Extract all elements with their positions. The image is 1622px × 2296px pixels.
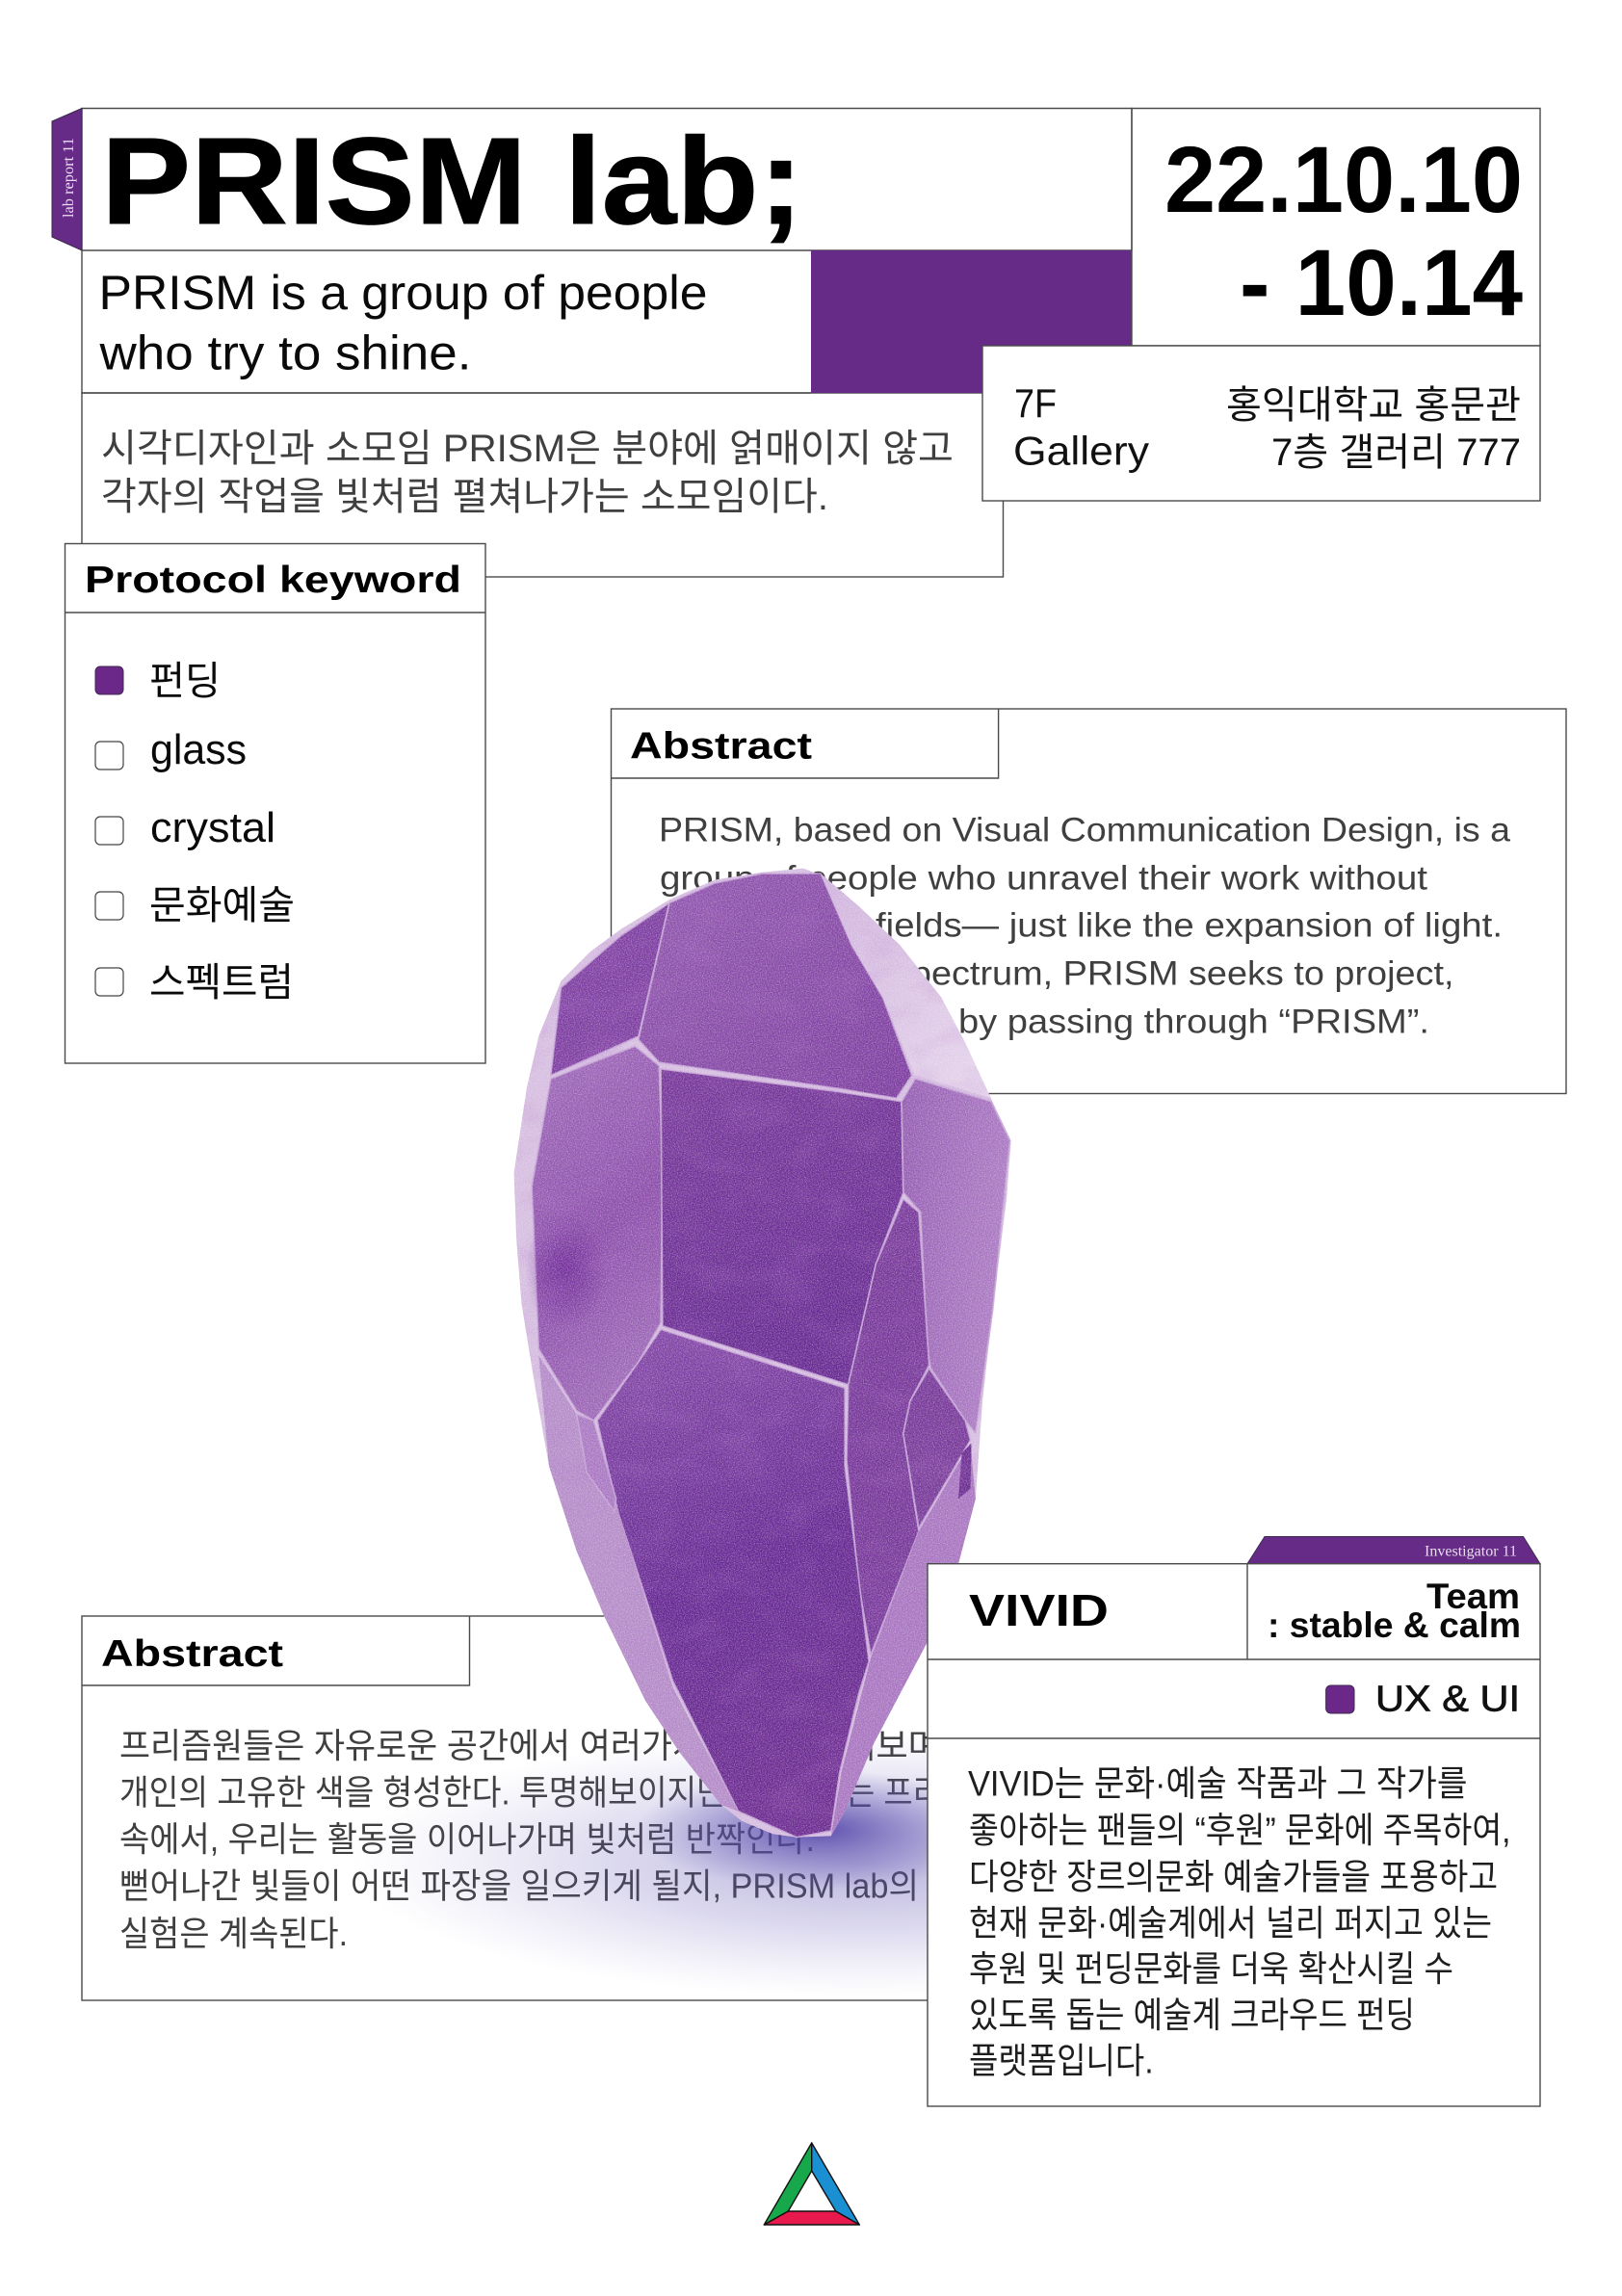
panel: date xyxy=(1132,108,1540,346)
logo: prism triangle xyxy=(764,2143,859,2225)
text: tagline: PRISM is a group of people xyxy=(98,266,707,320)
text: abstract korean body: 해보며 xyxy=(844,1726,940,1765)
title: PRISM lab; xyxy=(101,113,803,250)
tab: investigator: Investigator 11 xyxy=(1425,1543,1517,1560)
text: abstract korean body: 속에서, 우리는 활동을 이어나가며 빛처럼 반짝인다. xyxy=(119,1819,815,1859)
text: VIVID description: 다양한 장르의문화 예술가들을 포용하고 xyxy=(969,1857,1498,1897)
text: abstract english body: by passing through “PRISM”. xyxy=(958,1004,1429,1040)
panel: title header xyxy=(82,108,1132,250)
text: date: 22.10.10 xyxy=(1164,127,1523,232)
text: floor: Gallery xyxy=(1013,428,1149,474)
heading: abstract: Abstract xyxy=(101,1633,283,1675)
crystal shadow xyxy=(352,1731,1373,1996)
text: abstract korean body: 개인의 고유한 색을 형성한다. 투명해보이지만 xyxy=(119,1772,726,1813)
crystal silhouette xyxy=(514,869,1011,1838)
text: date: - 10.14 xyxy=(1240,230,1523,335)
text: VIVID description: 있도록 돕는 예술계 크라우드 펀딩 xyxy=(969,1996,1415,2035)
text: VIVID description: 현재 문화·예술계에서 널리 퍼지고 있는 xyxy=(969,1903,1492,1944)
category tag: UX and UI xyxy=(1326,1680,1520,1720)
team name: VIVID xyxy=(969,1585,1109,1635)
keyword: crystal xyxy=(95,804,275,851)
text: abstract korean body xyxy=(119,1726,942,1953)
keyword: glass xyxy=(95,726,247,773)
text: korean intro: 각자의 작업을 빛처럼 펼쳐나가는 소모임이다. xyxy=(101,476,828,518)
text: venue: 7층 갤러리 777 xyxy=(1271,431,1521,474)
panel: protocol keyword xyxy=(65,543,485,1063)
text: abstract korean body: 프리즘원들은 자유로운 공간에서 여러가지 xyxy=(119,1726,703,1765)
text: VIVID description xyxy=(968,1764,1510,2080)
text: abstract korean body: 뻗어나간 빛들이 어떤 파장을 일으키게 될지, PRISM lab의 xyxy=(119,1866,919,1905)
text: floor: 7F xyxy=(1014,380,1057,426)
panel: VIVID team card xyxy=(928,1564,1540,2106)
ribbon: lab report xyxy=(52,108,82,250)
purple colour block xyxy=(811,250,1132,393)
panel: tagline xyxy=(82,250,811,393)
crystal texture xyxy=(510,862,1031,1844)
keyword: crystal: crystal xyxy=(150,804,275,851)
team descriptor: : stable & calm xyxy=(1268,1605,1521,1645)
text: VIVID description: 후원 및 펀딩문화를 더욱 확산시킬 수 xyxy=(969,1949,1453,1989)
keyword: culture and arts: 문화예술 xyxy=(149,883,295,927)
keyword: funding: 펀딩 xyxy=(149,659,221,703)
text: tagline: who try to shine. xyxy=(98,326,472,379)
keyword: glass: glass xyxy=(150,726,247,773)
text: date xyxy=(1164,127,1523,335)
text: floor xyxy=(1013,380,1149,474)
text: venue: 홍익대학교 홍문관 xyxy=(1226,384,1521,427)
text: venue xyxy=(1226,384,1521,474)
text: abstract english body: group of people who unravel their work without xyxy=(660,859,1427,898)
text: korean intro: 시각디자인과 소모임 PRISM은 분야에 얽매이지 않고 xyxy=(101,428,954,470)
text: VIVID description: 플랫폼입니다. xyxy=(969,2042,1154,2080)
category tag: UX and UI: UX & UI xyxy=(1375,1680,1520,1720)
keyword: spectrum: 스펙트럼 xyxy=(149,960,294,1004)
crystal facets xyxy=(525,874,1010,1838)
team descriptor: Team xyxy=(1426,1577,1520,1616)
text: abstract english body: spectrum, PRISM seeks to project, xyxy=(893,955,1454,992)
text: VIVID description: VIVID는 문화·예술 작품과 그 작가를 xyxy=(968,1764,1468,1803)
text: abstract korean body: 실험은 계속된다. xyxy=(119,1914,348,1953)
tab: investigator xyxy=(1247,1537,1540,1564)
text: abstract english body: fields— just like the expansion of light. xyxy=(876,907,1503,944)
text: abstract korean body: 는 프리 xyxy=(846,1772,942,1813)
panel: abstract english xyxy=(611,709,1566,1094)
keyword: funding xyxy=(95,659,221,703)
panel: abstract korean xyxy=(82,1616,949,2000)
ribbon: lab report: lab report 11 xyxy=(61,138,77,218)
text: abstract english body xyxy=(659,811,1511,1040)
text: VIVID description: 좋아하는 팬들의 “후원” 문화에 주목하여, xyxy=(969,1811,1510,1850)
team descriptor xyxy=(1268,1577,1521,1645)
heading: protocol keyword: Protocol keyword xyxy=(85,560,461,601)
illustration: purple crystal xyxy=(510,862,1031,1844)
panel: description box xyxy=(82,393,1004,577)
panel: location xyxy=(982,346,1540,501)
text: abstract english body: PRISM, based on Visual Communication Design, is a xyxy=(659,811,1511,849)
text: tagline xyxy=(98,266,707,379)
heading: abstract: Abstract xyxy=(630,726,812,767)
text: korean intro xyxy=(101,428,954,518)
